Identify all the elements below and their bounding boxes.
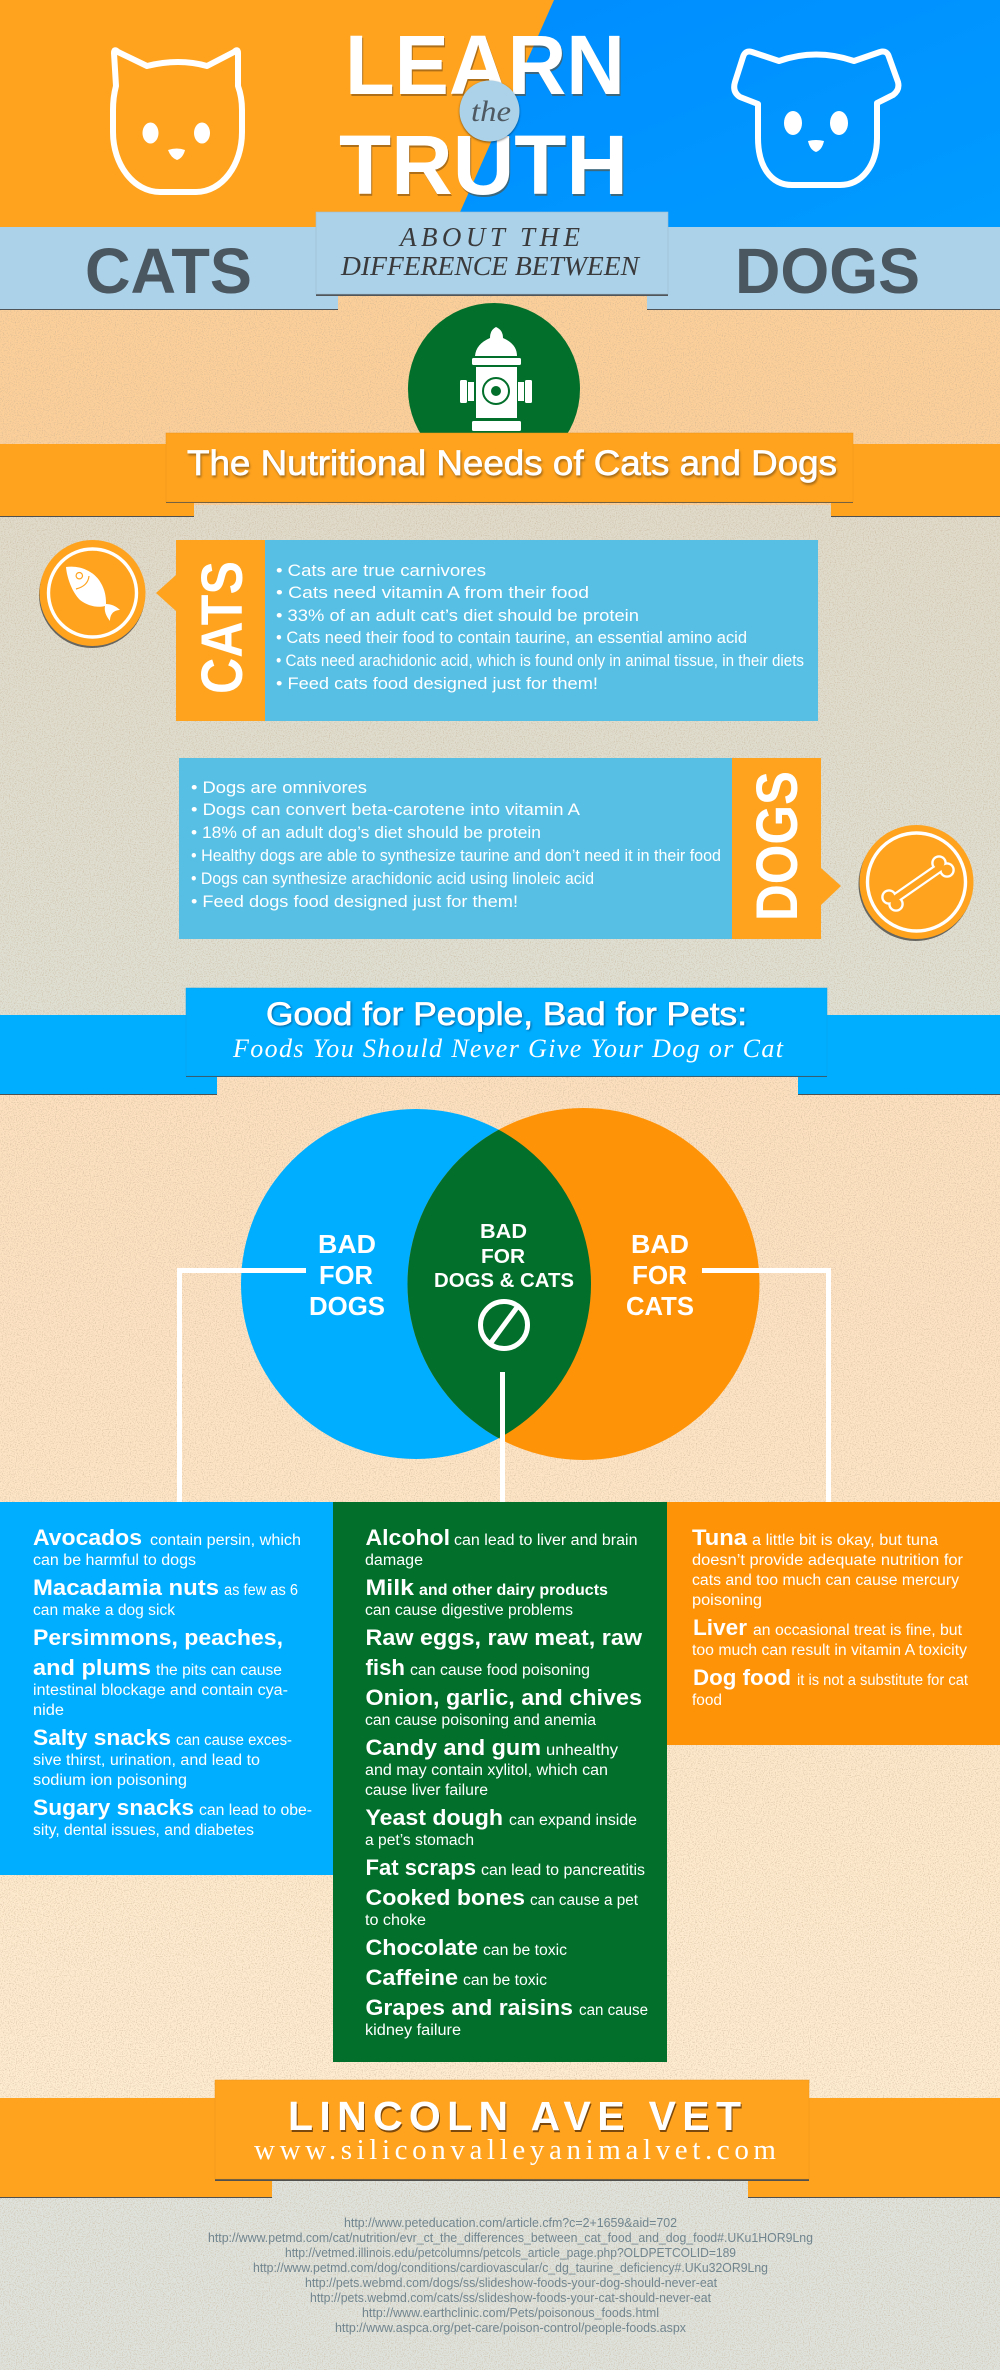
banner: lincoln ave vet: LINCOLN AVE VET — [288, 2093, 741, 2139]
panel: cats nutrition — [156, 540, 818, 721]
band: cats and dogs: DOGS — [735, 235, 920, 307]
panel: dogs nutrition: • Dogs can synthesize arachidonic acid using linoleic acid — [191, 870, 594, 888]
icon: fish badge — [39, 540, 146, 648]
panel: bad for dogs: the pits can cause — [156, 1662, 282, 1679]
panel: bad for both: damage — [365, 1552, 423, 1569]
panel: bad for both: to choke — [365, 1912, 426, 1929]
panel: bad for dogs: contain persin, which — [150, 1532, 301, 1549]
panel: bad for both: can cause a pet — [530, 1892, 639, 1909]
panel: dogs nutrition: • Healthy dogs are able to synthesize taurine and don’t need it in their food — [191, 847, 721, 865]
label: bad for both: BAD — [480, 1221, 527, 1243]
panel: bad for cats: a little bit is okay, but tuna — [752, 1532, 938, 1549]
panel: bad for both: Yeast dough — [366, 1805, 503, 1830]
sources list: http://www.aspca.org/pet-care/poison-control/people-foods.aspx — [335, 2321, 687, 2335]
panel: bad for dogs: sity, dental issues, and diabetes — [33, 1822, 254, 1839]
icon: cat face — [113, 50, 242, 192]
panel: bad for cats: Dog food — [693, 1665, 791, 1690]
panel: bad for both: Grapes and raisins — [366, 1995, 573, 2020]
label: bad for cats: BAD — [631, 1229, 689, 1259]
banner: lincoln ave vet: www.siliconvalleyanimalvet.com — [254, 2134, 776, 2166]
panel: bad for both: and may contain xylitol, which can — [365, 1762, 608, 1779]
panel: bad for dogs: and plums — [33, 1655, 151, 1680]
title: TRUTH — [339, 118, 628, 212]
panel: bad for both: and other dairy products — [419, 1582, 608, 1599]
sources list: http://www.earthclinic.com/Pets/poisonous_foods.html — [362, 2306, 659, 2320]
panel: bad for cats: poisoning — [692, 1592, 762, 1609]
panel: bad for dogs: Avocados — [33, 1525, 142, 1550]
panel: dogs nutrition: • 18% of an adult dog’s diet should be protein — [191, 824, 541, 842]
panel: bad for cats — [667, 1502, 1000, 1745]
panel: bad for both: kidney failure — [365, 2022, 461, 2039]
panel: dogs nutrition: • Dogs can convert beta-carotene into vitamin A — [191, 801, 580, 819]
label: bad for dogs: DOGS — [309, 1291, 385, 1321]
panel: bad for dogs: nide — [33, 1702, 64, 1719]
subtitle box: ABOUT THE — [398, 222, 580, 252]
panel: bad for both: Cooked bones — [366, 1885, 525, 1910]
panel: bad for dogs: Macadamia nuts — [33, 1575, 219, 1600]
panel: bad for cats: food — [692, 1692, 722, 1709]
panel: dogs nutrition: • Dogs are omnivores — [191, 779, 367, 797]
panel: bad for both: unhealthy — [546, 1742, 618, 1759]
subtitle box — [316, 212, 668, 296]
panel: bad for cats: too much can result in vitamin A toxicity — [692, 1642, 967, 1659]
panel: bad for dogs: can make a dog sick — [33, 1602, 175, 1619]
panel: cats nutrition: • Cats are true carnivores — [276, 562, 486, 580]
panel: cats nutrition: • Cats need arachidonic acid, which is found only in animal tissue, in their diets — [276, 652, 804, 670]
banner: nutritional needs — [0, 433, 1000, 517]
panel: bad for both: Candy and gum — [366, 1735, 541, 1760]
panel: bad for dogs: sodium ion poisoning — [33, 1772, 187, 1789]
sources list: http://www.peteducation.com/article.cfm?c=2+1659&aid=702 — [344, 2216, 677, 2230]
sources list: http://www.petmd.com/dog/conditions/cardiovascular/c_dg_taurine_deficiency#.UKu32OR9Lng — [253, 2261, 768, 2275]
panel: bad for dogs: can cause exces- — [176, 1732, 292, 1749]
panel: bad for both: fish — [366, 1655, 405, 1680]
connector lines — [177, 1268, 831, 1502]
label: bad for both: FOR — [481, 1246, 526, 1268]
label: bad for cats: FOR — [632, 1260, 687, 1290]
panel: bad for both: Fat scraps — [366, 1855, 476, 1880]
sources list: http://pets.webmd.com/cats/ss/slideshow-foods-your-cat-should-never-eat — [310, 2291, 712, 2305]
panel: bad for both: can cause poisoning and anemia — [365, 1712, 596, 1729]
panel: bad for both: can cause — [579, 2002, 648, 2019]
title: LEARN — [345, 18, 625, 112]
label: bad for dogs: FOR — [319, 1260, 373, 1290]
band: cats and dogs: CATS — [85, 235, 252, 307]
sources list: http://pets.webmd.com/dogs/ss/slideshow-foods-your-dog-should-never-eat — [305, 2276, 718, 2290]
icon: bone badge — [858, 825, 974, 941]
panel: bad for both: can be toxic — [483, 1942, 567, 1959]
panel: dogs nutrition — [179, 758, 841, 939]
panel: bad for dogs: can be harmful to dogs — [33, 1552, 196, 1569]
panel: bad for both: can be toxic — [463, 1972, 547, 1989]
panel: bad for both: cause liver failure — [365, 1782, 488, 1799]
panel: dogs nutrition: • Feed dogs food designed just for them! — [191, 893, 518, 911]
panel: bad for dogs: as few as 6 — [224, 1582, 298, 1599]
the badge: the — [471, 95, 511, 128]
panel: bad for dogs: Salty snacks — [33, 1725, 171, 1750]
the badge — [460, 80, 520, 142]
panel: bad for both: Caffeine — [366, 1965, 458, 1990]
banner: good for people: Good for People, Bad for Pets: — [266, 996, 747, 1032]
panel: bad for both: can expand inside — [509, 1812, 637, 1829]
panel: bad for both: Alcohol — [366, 1525, 450, 1550]
sources list: http://vetmed.illinois.edu/petcolumns/petcols_article_page.php?OLDPETCOLID=189 — [285, 2246, 736, 2260]
venn diagram — [177, 1108, 831, 1502]
panel: bad for both: can lead to liver and brain — [454, 1532, 638, 1549]
panel: bad for both: Chocolate — [366, 1935, 478, 1960]
panel: bad for both: can lead to pancreatitis — [481, 1862, 645, 1879]
panel: bad for cats: cats and too much can cause mercury — [692, 1572, 959, 1589]
panel: bad for dogs: Persimmons, peaches, — [33, 1625, 283, 1650]
label: bad for cats: CATS — [626, 1291, 694, 1321]
panel: cats nutrition: • 33% of an adult cat’s diet should be protein — [276, 607, 639, 625]
panel: bad for cats: doesn’t provide adequate nutrition for — [692, 1552, 963, 1569]
panel: cats nutrition: • Cats need vitamin A from their food — [276, 584, 589, 602]
panel: bad for both: can cause food poisoning — [410, 1662, 590, 1679]
panel: bad for both: a pet’s stomach — [365, 1832, 474, 1849]
icon: prohibited — [480, 1302, 528, 1348]
label: bad for both — [434, 1221, 574, 1292]
panel: bad for cats: it is not a substitute for cat — [797, 1672, 969, 1689]
panel: bad for cats: an occasional treat is fine, but — [753, 1622, 963, 1639]
label: bad for cats — [626, 1229, 694, 1321]
panel: bad for cats: Tuna — [692, 1525, 748, 1550]
sources list: http://www.petmd.com/cat/nutrition/evr_ct_the_differences_between_cat_food_and_dog_food#.UKu1HOR9Lng — [208, 2231, 813, 2245]
label: bad for dogs — [309, 1229, 385, 1321]
label: bad for both: DOGS & CATS — [434, 1270, 574, 1292]
header background — [0, 0, 1000, 228]
panel: bad for both: can cause digestive problems — [365, 1602, 573, 1619]
subtitle box: DIFFERENCE BETWEEN — [340, 251, 641, 281]
panel: cats nutrition: • Feed cats food designed just for them! — [276, 675, 598, 693]
panel: bad for dogs: intestinal blockage and contain cya- — [33, 1682, 288, 1699]
panel: bad for dogs: can lead to obe- — [199, 1802, 312, 1819]
banner: nutritional needs: The Nutritional Needs of Cats and Dogs — [187, 444, 837, 483]
icon: dog face — [734, 52, 898, 185]
icon: hydrant — [408, 303, 580, 475]
panel: cats nutrition: • Cats need their food to contain taurine, an essential amino acid — [276, 629, 747, 647]
band: cats and dogs — [0, 227, 1000, 310]
panel: bad for dogs — [0, 1502, 333, 1875]
panel: bad for dogs: sive thirst, urination, and lead to — [33, 1752, 260, 1769]
panel: dogs nutrition: DOGS — [745, 771, 810, 921]
banner: lincoln ave vet — [0, 2080, 1000, 2198]
panel: bad for dogs: Sugary snacks — [33, 1795, 194, 1820]
panel: bad for both: Onion, garlic, and chives — [366, 1685, 642, 1710]
title — [339, 18, 628, 212]
panel: cats nutrition: CATS — [190, 561, 255, 694]
panel: bad for both: Raw eggs, raw meat, raw — [366, 1625, 643, 1650]
panel: bad for both — [333, 1502, 667, 2062]
panel: bad for cats: Liver — [693, 1615, 747, 1640]
banner: good for people — [0, 988, 1000, 1095]
sources list — [208, 2216, 813, 2335]
banner: good for people: Foods You Should Never Give Your Dog or Cat — [232, 1034, 784, 1063]
label: bad for dogs: BAD — [318, 1229, 376, 1259]
panel: bad for both: Milk — [366, 1575, 415, 1600]
